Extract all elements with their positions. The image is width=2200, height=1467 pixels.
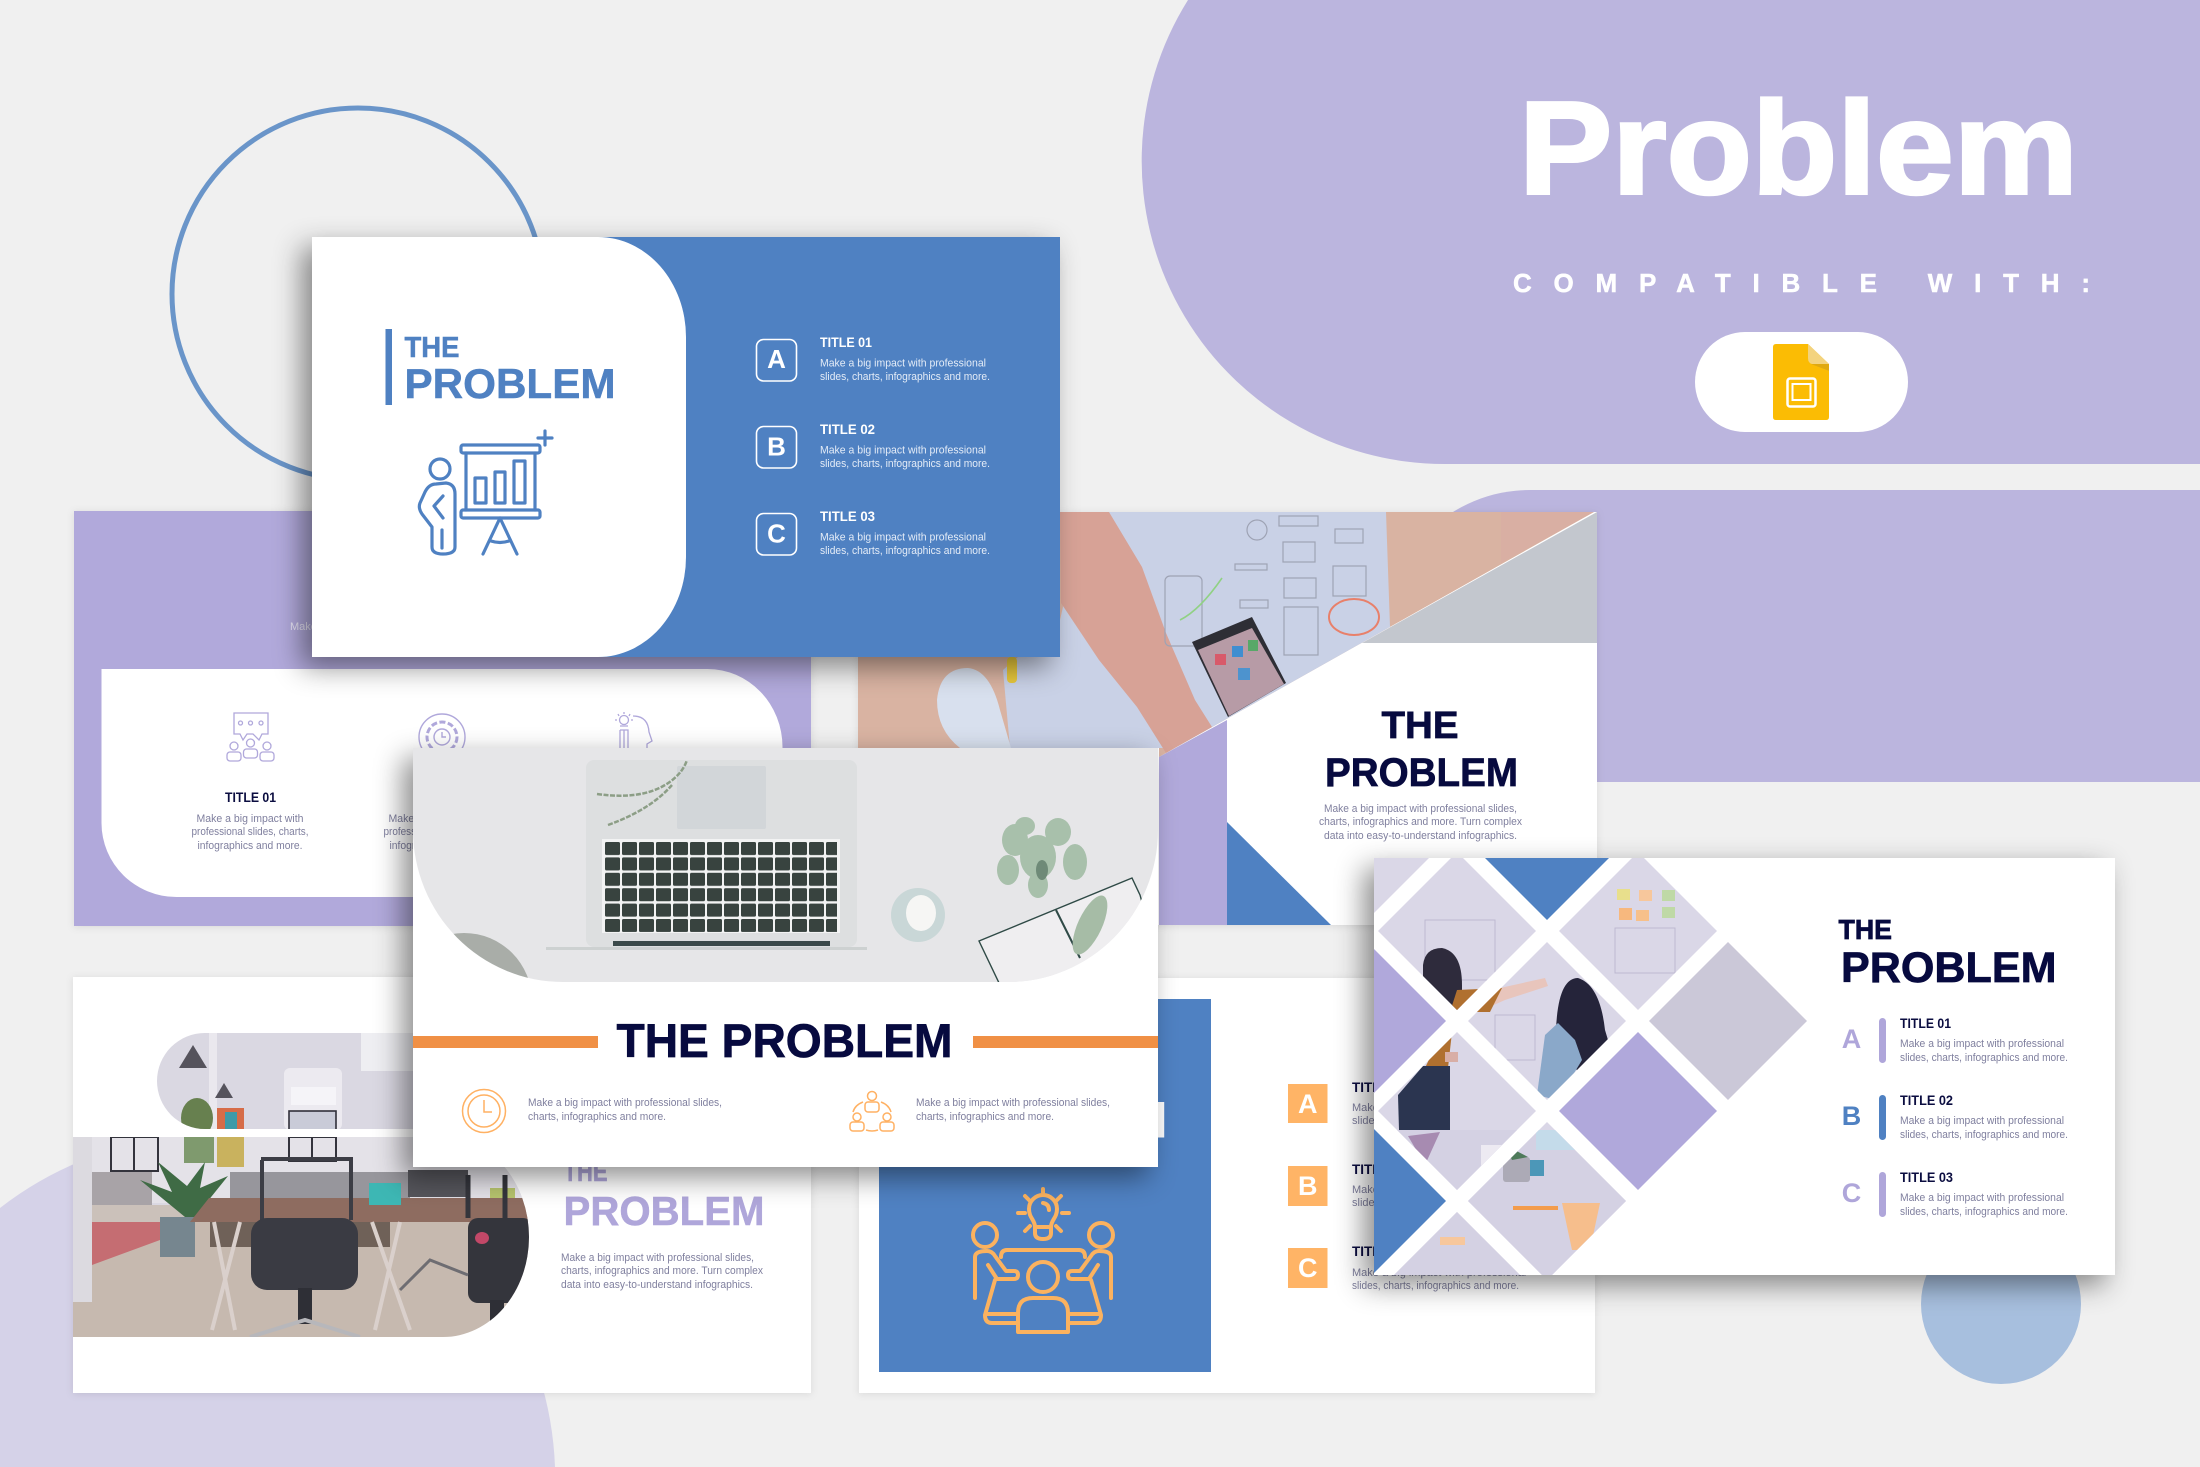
item A: slides, charts, infographics and more. [1900, 1052, 2068, 1064]
item B: slides, charts, infographics and more. [820, 458, 990, 470]
icon: presenter with chart [419, 431, 552, 554]
item A: TITLE 01 [1900, 1016, 1951, 1031]
item C: Make a big impact with professional [1900, 1192, 2064, 1204]
item C: Make a big impact with professional [820, 532, 986, 544]
heading on panel: PROBLEM [917, 1092, 1167, 1148]
photo: desk with wireframes [858, 512, 1597, 762]
band: right purple [1384, 490, 2200, 782]
heading: THE [1382, 705, 1458, 747]
slide: photo with diagonal [858, 512, 1597, 925]
text block [1319, 803, 1522, 842]
pill: Google Slides badge [1695, 332, 1908, 432]
item C: C [1842, 1178, 1861, 1208]
circle outline: top left [172, 108, 544, 480]
text 02 [384, 813, 500, 852]
item A [1842, 1016, 2068, 1064]
purple strip [1159, 720, 1227, 925]
heading: PROBLEM [1325, 751, 1518, 795]
slide: blue panel with team icon [859, 978, 1595, 1393]
slide: diamonds [1344, 848, 2124, 1304]
slide: laptop photo [396, 748, 1165, 1167]
item B [756, 422, 990, 470]
items text: TITLE 01 [1352, 1080, 1409, 1095]
text left: Make a big impact with professional slides, [528, 1097, 722, 1109]
icon: chat and people [227, 713, 274, 761]
heading: THE PROBLEM [616, 1014, 952, 1067]
intro text: Make a big impact with professional slides [290, 621, 496, 633]
blue panel [879, 999, 1211, 1372]
items text: Make a big impact with professional [1352, 1267, 1526, 1279]
text block: data into easy-to-understand infographics. [1324, 830, 1517, 842]
item B: Make a big impact with professional [820, 444, 986, 456]
item A: Make a big impact with professional [820, 358, 986, 370]
purple diamond left [1374, 949, 1446, 1093]
items text: TITLE 02 [1352, 1162, 1408, 1177]
blob: top right purple [1142, 0, 2200, 464]
text left [528, 1097, 722, 1123]
slide: blue with presenter [312, 237, 1060, 657]
text 02: professional slides, charts, [384, 826, 500, 838]
item A: A [1842, 1024, 1861, 1054]
heading: Problem: Problem [1519, 74, 2078, 222]
photo: office [73, 1033, 533, 1340]
heading: problem: PROBLEM [564, 1188, 764, 1234]
text 01 [192, 813, 308, 852]
gray triangle [1362, 512, 1597, 643]
photo diamonds: whiteboard team [1374, 858, 1717, 1275]
item C: slides, charts, infographics and more. [820, 545, 990, 557]
item C: TITLE 03 [820, 509, 875, 524]
text block: Make a big impact with professional slides, [1324, 803, 1517, 815]
items text: Make a big impact with professional [1352, 1184, 1526, 1196]
badge C: C [1298, 1253, 1317, 1283]
heading: the: THE [404, 332, 460, 364]
items text: slides, charts, infographics and more. [1352, 1280, 1519, 1292]
item A: TITLE 01 [820, 335, 872, 350]
item B: Make a big impact with professional [1900, 1115, 2064, 1127]
item C: TITLE 03 [1900, 1170, 1953, 1185]
slide: office photo [73, 977, 811, 1393]
text right: Make a big impact with professional slides, [916, 1097, 1110, 1109]
icon: head and bulb [615, 712, 652, 750]
items text [1352, 1080, 1534, 1292]
blue triangle [1227, 822, 1331, 925]
text block [561, 1252, 763, 1291]
text 02: Make a big impact with [388, 813, 496, 825]
circle: bottom left lilac [0, 1136, 555, 1467]
heading: the: THE [564, 1156, 608, 1187]
icon: gear and clock [419, 714, 465, 760]
gray diamond [1649, 942, 1807, 1100]
text 02: infographics and more. [390, 840, 494, 852]
text 01: professional slides, charts, [192, 826, 308, 838]
heading: the: THE [1838, 914, 1892, 945]
purple diamond [1559, 1032, 1717, 1190]
diamond mosaic [1374, 858, 1807, 1275]
white rounded panel [102, 669, 782, 897]
text right [916, 1097, 1110, 1123]
item A: Make a big impact with professional [1900, 1038, 2064, 1050]
heading: problem: PROBLEM [1841, 944, 2056, 992]
subheading: compatible with: COMPATIBLE WITH: [1513, 268, 2090, 298]
white rounded panel [312, 237, 686, 657]
slide: purple with three columns [74, 511, 811, 926]
item B: B [767, 432, 786, 462]
item C: C [767, 518, 786, 548]
text block: Make a big impact with professional slides, [561, 1252, 754, 1264]
item A: slides, charts, infographics and more. [820, 371, 990, 383]
items text: TITLE 03 [1352, 1244, 1409, 1259]
icon: team around table with bulb [973, 1189, 1113, 1332]
text 01: infographics and more. [198, 840, 302, 852]
text left: charts, infographics and more. [528, 1111, 666, 1123]
text block: charts, infographics and more. Turn complex [561, 1265, 763, 1277]
item C [1842, 1170, 2068, 1218]
circle: bottom right blue [1921, 1224, 2081, 1384]
badge B [1288, 1166, 1328, 1206]
photo: laptop on desk [413, 748, 1158, 982]
left orange bar [413, 1036, 598, 1048]
items text: slides, charts, infographics and more. [1352, 1197, 1534, 1209]
item B: slides, charts, infographics and more. [1900, 1129, 2068, 1141]
item B: B [1842, 1101, 1861, 1131]
text right: charts, infographics and more. [916, 1111, 1054, 1123]
badge A [1288, 1084, 1328, 1123]
item C [756, 509, 990, 557]
text block: charts, infographics and more. Turn complex [1319, 816, 1522, 828]
item B [1842, 1093, 2068, 1141]
title 01: TITLE 01 [225, 790, 276, 805]
blue diamond top [1485, 858, 1609, 920]
text block: data into easy-to-understand infographics. [561, 1279, 753, 1291]
badge C [1288, 1248, 1328, 1288]
icon: Google Slides file [1773, 344, 1829, 420]
item A [756, 335, 990, 383]
badge B: B [1298, 1171, 1317, 1201]
items text: Make a big impact with professional [1352, 1102, 1526, 1114]
accent bar [386, 329, 392, 405]
item B: TITLE 02 [1900, 1093, 1953, 1108]
blue diamond left [1374, 1129, 1446, 1273]
icon: clock [462, 1090, 506, 1132]
item B: TITLE 02 [820, 422, 875, 437]
text 01: Make a big impact with [196, 813, 304, 825]
heading: problem: PROBLEM [404, 360, 616, 407]
items text: slides, charts, infographics and more. [1352, 1115, 1534, 1127]
item A: A [767, 344, 786, 374]
item C: slides, charts, infographics and more. [1900, 1206, 2068, 1218]
icon: team cycle [850, 1092, 894, 1131]
badge A: A [1298, 1089, 1317, 1119]
right orange bar [973, 1036, 1158, 1048]
